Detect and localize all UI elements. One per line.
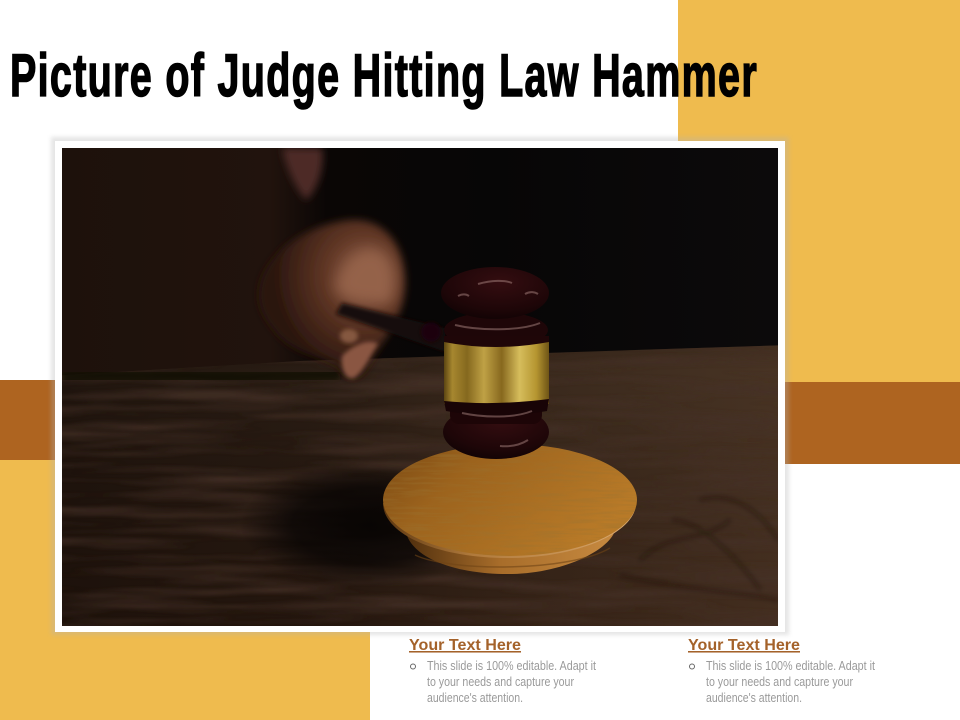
text block: right column (688, 637, 875, 705)
body text: left (427, 659, 596, 705)
photo table (50, 340, 790, 640)
gavel head (421, 267, 549, 459)
background: brown band right (780, 382, 960, 464)
body text: left: audience's attention. (427, 691, 523, 705)
gavel handle (336, 303, 445, 352)
photo background wall and robe (62, 148, 778, 376)
bullet: left (410, 664, 416, 669)
body text: right (706, 659, 875, 705)
judge sleeve highlight (282, 148, 323, 200)
heading: right: Your Text Here (688, 637, 800, 654)
judge hand (259, 220, 405, 378)
sound block (383, 444, 637, 574)
shadow beneath sound block (253, 469, 448, 580)
body text: left: This slide is 100% editable. Adapt it (427, 659, 596, 673)
heading: left: Your Text Here (409, 637, 521, 654)
bullet: right (690, 664, 694, 669)
gavel highlights (455, 281, 540, 446)
background: yellow block bottom left (0, 460, 370, 720)
body text: left: to your needs and capture your (427, 675, 574, 689)
body text: right: audience's attention. (706, 691, 802, 705)
body text: right: This slide is 100% editable. Adapt it (706, 659, 875, 673)
text block: left column (409, 637, 596, 705)
photo frame (51, 137, 789, 635)
body text: right: to your needs and capture your (706, 675, 853, 689)
background: brown band left (0, 380, 60, 460)
photo: judge hitting gavel (50, 148, 790, 640)
background: yellow block top right (678, 0, 960, 382)
